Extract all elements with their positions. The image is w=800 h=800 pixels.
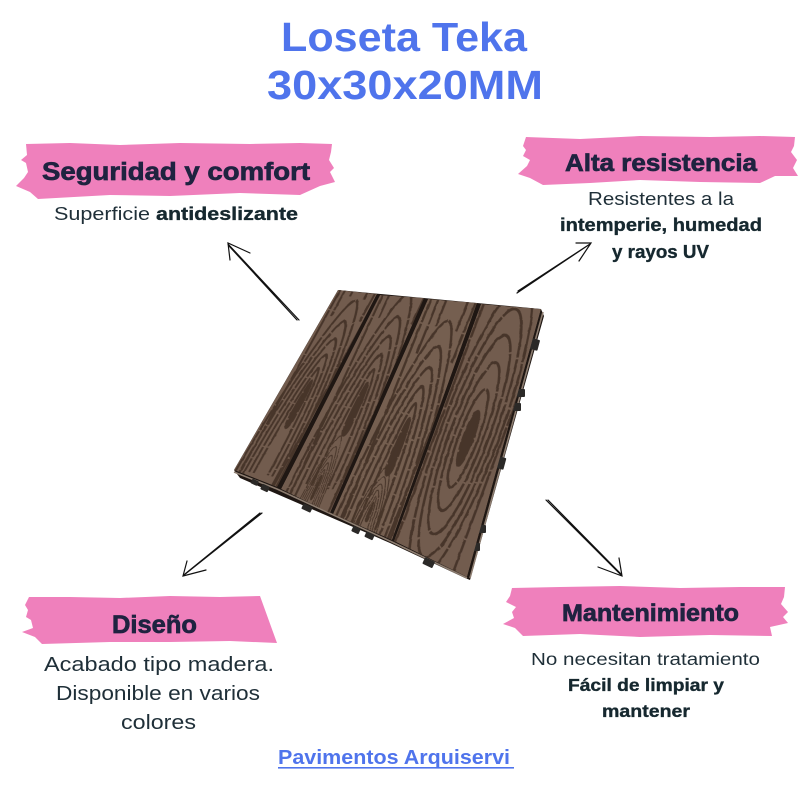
panel: diseño	[22, 596, 277, 734]
plank 2	[281, 295, 424, 513]
arrow: to alta resistencia	[517, 243, 591, 293]
description: acabado	[44, 654, 274, 734]
arrow: to seguridad	[228, 243, 299, 320]
description: no necesitan tratamiento	[531, 649, 760, 721]
product image: wood decking tile	[234, 290, 544, 580]
brush banner: alta resistencia	[518, 136, 798, 185]
plank 1	[234, 290, 377, 487]
heading: mantenimiento: Mantenimiento	[562, 600, 739, 627]
panel: seguridad y comfort	[16, 143, 335, 224]
panel: alta resistencia	[518, 136, 798, 262]
plank 4	[394, 304, 541, 577]
description: resistentes: Resistentes a la	[588, 188, 735, 209]
light bottom edge	[234, 312, 543, 578]
arrow: to mantenimiento	[546, 500, 622, 576]
footer link: Pavimentos Arquiservi	[278, 747, 510, 769]
panel: mantenimiento	[503, 586, 788, 721]
description: acabado: colores	[121, 712, 196, 734]
description: acabado: Disponible en varios	[56, 683, 260, 705]
brush banner: seguridad	[16, 143, 335, 199]
connector tabs	[251, 338, 540, 568]
description: no necesitan tratamiento: mantener	[602, 701, 690, 721]
arrow: to diseño	[183, 513, 262, 576]
heading: seguridad y comfort: Seguridad y comfort	[42, 158, 311, 186]
description: acabado: Acabado tipo madera.	[44, 654, 274, 676]
description: resistentes: y rayos UV	[612, 241, 710, 262]
description: no necesitan tratamiento: Fácil de limpiar y	[568, 675, 724, 695]
description: resistentes	[560, 188, 762, 262]
tile base and side edge	[234, 290, 544, 580]
description: superficie antideslizante: Superficie	[54, 203, 150, 224]
brush banner: diseño	[22, 596, 277, 644]
title	[267, 14, 543, 108]
title: 30x30x20MM	[267, 62, 543, 108]
title: Loseta Teka	[281, 14, 528, 60]
heading: diseño: Diseño	[112, 611, 197, 639]
brush banner: mantenimiento	[503, 586, 788, 637]
plank 3	[333, 299, 477, 540]
heading: alta resistencia: Alta resistencia	[565, 150, 758, 177]
description: no necesitan tratamiento: No necesitan tratamiento	[531, 649, 760, 669]
description: superficie antideslizante	[54, 203, 298, 224]
description: resistentes: intemperie, humedad	[560, 214, 762, 235]
description: superficie antideslizante: antideslizante	[156, 203, 298, 224]
